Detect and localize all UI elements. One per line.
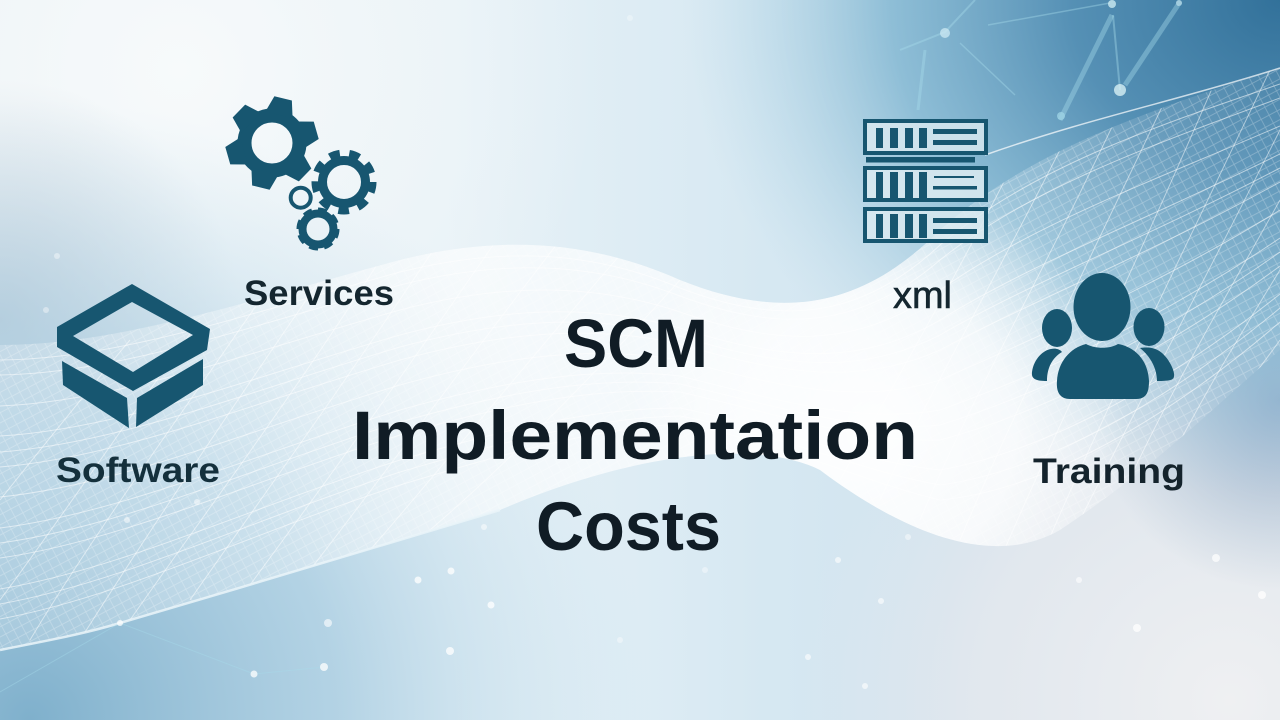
label: Services: Services (244, 274, 394, 313)
label: xml: xml (893, 275, 952, 317)
title: SCM (564, 305, 708, 382)
icon: server stack (865, 121, 986, 241)
icon: small ring (291, 188, 311, 208)
icon: people group (1032, 273, 1174, 399)
title: Implementation (352, 397, 918, 474)
label: Training: Training (1033, 452, 1185, 491)
icon: gears (224, 95, 372, 248)
label: Software: Software (56, 451, 220, 490)
icon: large gear (224, 95, 320, 191)
icon: medium gear (316, 154, 372, 210)
title: Costs (536, 488, 721, 565)
icon: box (57, 284, 210, 428)
icon: small gear (298, 210, 338, 248)
title (352, 305, 918, 565)
